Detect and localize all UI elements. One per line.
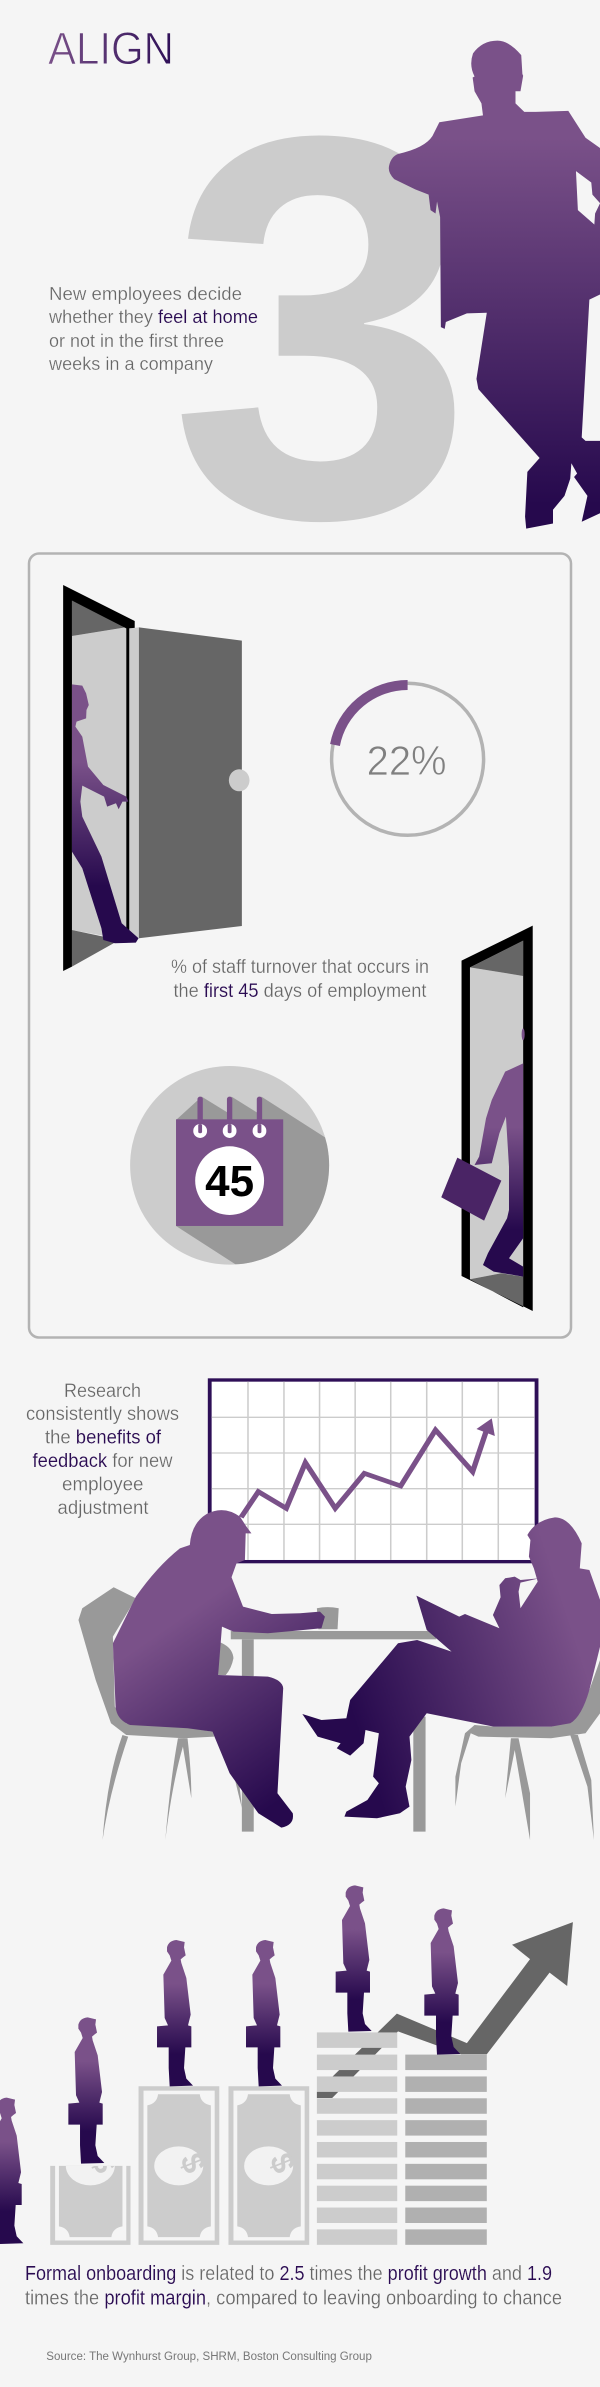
illustration: feedback meeting [78, 1380, 600, 1840]
man 2 [68, 2017, 104, 2164]
right man silhouette [302, 1517, 600, 1818]
silhouette: leaning man [389, 41, 600, 529]
dollar sign: second note: $ [173, 2148, 213, 2178]
table and cup [231, 1607, 436, 1832]
big number 3: 3 [169, 23, 474, 632]
stack of bars: left [317, 2032, 397, 2245]
source note: Source: The Wynhurst Group, SHRM, Boston Consulting Group [46, 2351, 372, 2363]
text block: feel at home: or not in the first three [49, 330, 224, 351]
text block: feel at home [48, 283, 258, 374]
text block: benefits of feedback [26, 1381, 179, 1519]
text block: benefits of feedback: adjustment [58, 1498, 149, 1519]
man 6 [424, 1908, 460, 2055]
banknote: third [228, 2086, 309, 2245]
left chair [78, 1587, 242, 1840]
banknote: partial [50, 2166, 130, 2245]
text block: formal onboarding: times the profit margin, compared to leaving onboarding to chance [25, 2288, 562, 2310]
right chair [455, 1660, 600, 1840]
text block: benefits of feedback: employee [62, 1474, 144, 1496]
icon: calendar 45 days [130, 1066, 333, 1267]
text block: feel at home: New employees decide [49, 283, 242, 304]
text block: benefits of feedback: Research [64, 1381, 141, 1402]
men climbing the stacks [0, 1885, 460, 2244]
text block: benefits of feedback: consistently shows [26, 1404, 179, 1425]
text block: formal onboarding: Formal onboarding is related to 2.5 times the profit growth and 1.9 [25, 2263, 552, 2285]
panel: staff turnover [29, 554, 571, 1338]
illustration: open door with man leaving [63, 585, 250, 971]
man 5 [336, 1885, 372, 2032]
dollar sign: partial note: $ [84, 2148, 124, 2178]
text block: feel at home: weeks in a company [48, 353, 214, 374]
text block: formal onboarding [25, 2263, 562, 2310]
left man silhouette [113, 1510, 325, 1828]
line chart board [210, 1380, 537, 1562]
text block: benefits of feedback: the benefits of [45, 1428, 162, 1448]
text block: turnover caption: % of staff turnover that occurs in [171, 957, 429, 978]
banknote: second [139, 2086, 219, 2245]
calendar number: 45 [205, 1157, 254, 1206]
stack of bars: right [405, 2055, 487, 2245]
man 3 [157, 1940, 193, 2086]
text block: feel at home: whether they feel at home [48, 306, 258, 327]
title: ALIGN [48, 23, 174, 74]
text block: turnover caption [171, 957, 429, 1002]
arrow [317, 1922, 573, 2098]
illustration: door with man entering [441, 926, 533, 1311]
dollar sign: third note: $ [263, 2148, 303, 2178]
man 4 [246, 1940, 282, 2086]
chart: 22 percent ring: 22% [367, 737, 447, 784]
text block: turnover caption: the first 45 days of employment [174, 981, 427, 1002]
man 1 [0, 2098, 23, 2244]
text block: benefits of feedback: feedback for new [32, 1451, 173, 1472]
illustration: profit growth stacks [50, 1922, 573, 2245]
chart: 22 percent ring [332, 683, 484, 835]
